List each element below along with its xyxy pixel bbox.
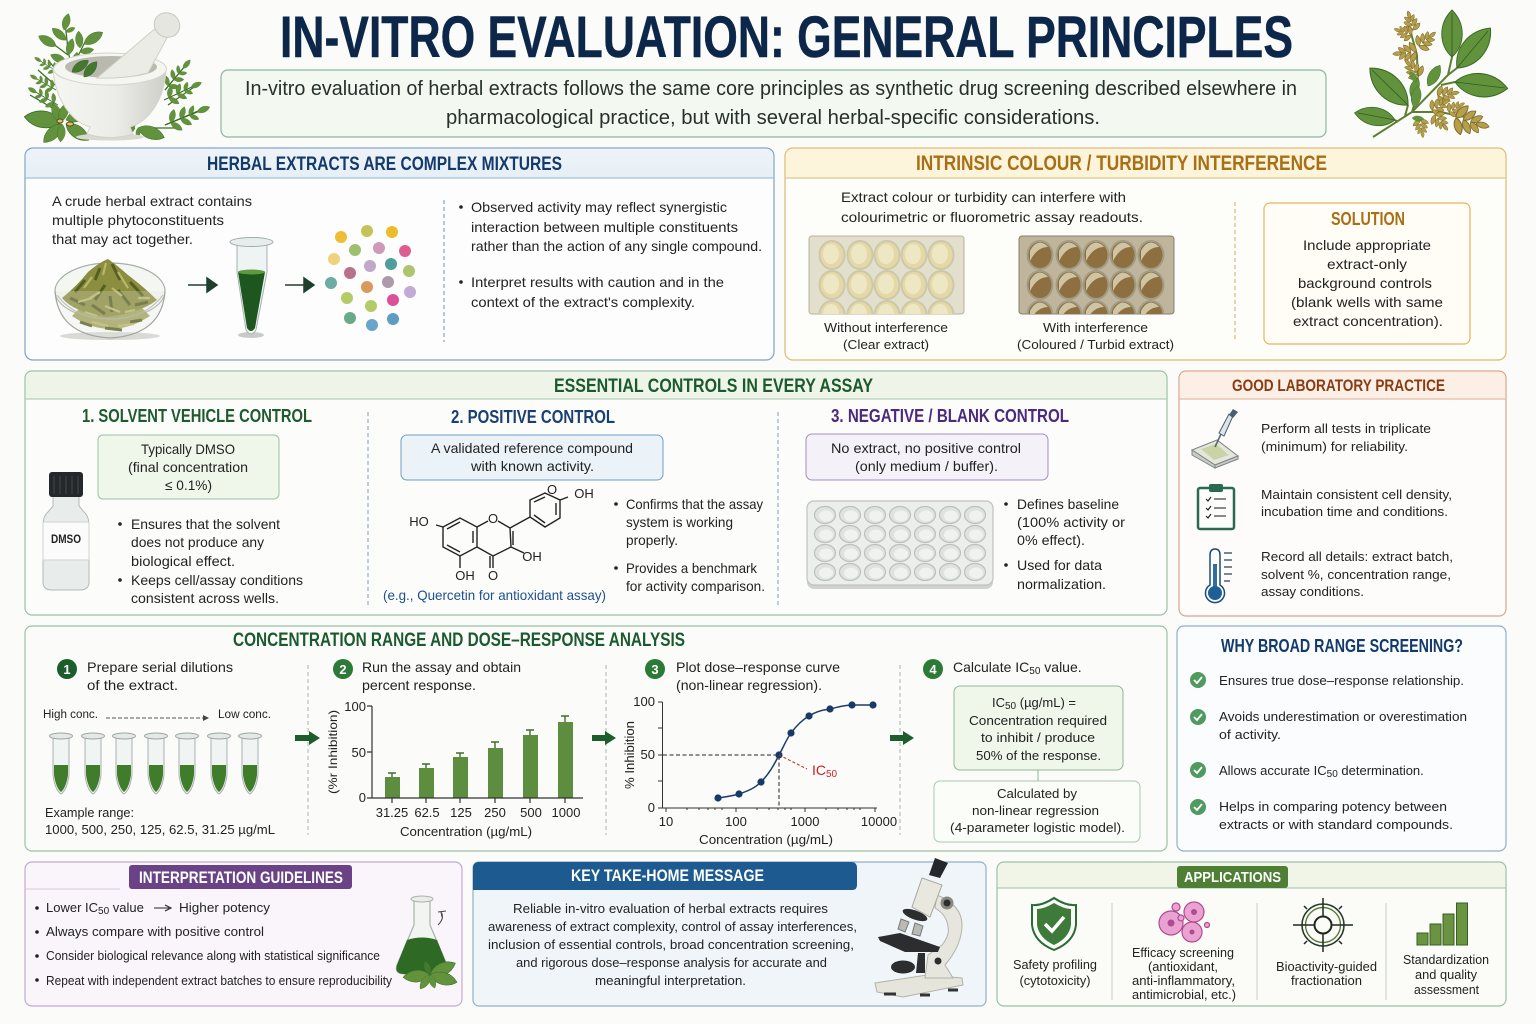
GLP text 2: incubation time and conditions. [1261,504,1448,519]
bullets: normalization. [1017,576,1106,592]
dose-response curve: 10000 [861,814,897,829]
GLP text 3: Record all details: extract batch, [1261,549,1453,564]
step 3 [622,659,897,847]
guideline bullets [35,900,392,988]
dose-response curve: 100 [725,814,747,829]
dose-response curve [622,694,897,847]
bullets: 0% effect). [1017,532,1085,548]
tubes [50,733,262,794]
bar chart: (%r Inhibition) [326,710,340,794]
callout: A validated reference compound [431,440,633,456]
plate: with interference [1018,236,1174,314]
badge heading: INTERPRETATION GUIDELINES [139,868,343,887]
icon: flask with herbs [396,896,459,991]
step 3: Plot dose–response curve [676,659,840,675]
plate captions: Without interference [824,320,948,335]
step 2: Run the assay and obtain [362,659,521,675]
IC50 definition: 50 [1005,701,1017,712]
efficacy screening: anti-inflammatory, [1132,974,1235,988]
check list: Helps in comparing potency between [1219,799,1447,814]
bullets: Ensures that the solvent [131,516,280,532]
check list [1190,672,1467,832]
guideline bullets: value [109,900,144,915]
efficacy screening [1132,902,1236,1002]
panel: essential controls [25,371,1167,615]
solvent vehicle control [43,406,312,606]
dose-response curve: 10 [659,814,673,829]
message text: and rigorous dose–response analysis for accurate and [516,955,827,970]
guideline bullets: 50 [98,906,110,917]
solution box [1264,203,1470,344]
icon: clipboard [1198,484,1234,529]
bullet text: Interpret results with caution and in the [471,274,724,290]
bullets: properly. [626,532,678,548]
step 1: of the extract. [87,677,178,693]
step 4: Calculate IC [953,659,1029,675]
panel: good laboratory practice [1179,371,1506,616]
GLP text 3: solvent %, concentration range, [1261,567,1451,582]
bullet text [459,199,762,310]
panel: colour and turbidity interference [785,148,1506,360]
dose-response curve: % Inhibition [622,721,637,789]
panel: applications [997,862,1506,1006]
subtitle box: pharmacological practice, but with several herbal-specific considerations. [446,107,1100,129]
heading: CONCENTRATION RANGE AND DOSE–RESPONSE ANALYSIS [233,630,685,651]
intro text: multiple phytoconstituents [52,212,224,228]
standardization: and quality [1415,968,1478,982]
heading: INTRINSIC COLOUR / TURBIDITY INTERFERENCE [916,152,1327,175]
efficacy screening: Efficacy screening [1132,946,1234,960]
step 4 [923,659,1140,842]
check list: Allows accurate IC [1219,763,1327,778]
phytoconstituent dots [325,225,416,331]
bar chart: 500 [520,805,542,820]
regression note: non-linear regression [972,803,1099,818]
chemical structure: quercetin: OH [455,568,475,583]
plate captions [824,320,1174,352]
icon: thermometer [1206,549,1232,603]
step 1: Low conc. [218,709,271,721]
step 1: High conc. [43,709,98,721]
bioactivity-guided fractionation [1276,898,1377,988]
bullet text: Observed activity may reflect synergistic [471,199,727,215]
step 1: 1000, 500, 250, 125, 62.5, 31.25 µg/mL [45,822,275,837]
intro text: A crude herbal extract contains [52,193,252,209]
step 1: Example range: [45,805,134,820]
plate captions: (Clear extract) [843,337,929,352]
description [841,189,1143,225]
icon: pipette and plate [1192,409,1238,468]
standardization: Standardization [1403,953,1489,967]
guideline bullets: Higher potency [179,900,271,915]
message text: Reliable in-vitro evaluation of herbal extracts requires [513,901,828,916]
subtitle box [221,70,1326,137]
dose-response curve: IC [812,762,826,778]
bar chart: Concentration (µg/mL) [400,824,532,839]
chemical structure: quercetin: OH [522,549,542,564]
step 1: Prepare serial dilutions [87,659,233,675]
step 4: 50 [1029,666,1041,677]
icon: bowl of herb powder [55,259,165,340]
plate captions: With interference [1043,320,1148,335]
badge heading: APPLICATIONS [1184,869,1281,886]
bar chart: 0 [359,790,366,805]
bullets: consistent across wells. [131,590,279,606]
positive control [383,407,765,603]
description: colourimetric or fluorometric assay readouts. [841,209,1143,225]
callout: with known activity. [470,458,594,474]
message text: meaningful interpretation. [595,973,746,988]
arrow [188,278,217,292]
heading: GOOD LABORATORY PRACTICE [1232,376,1445,395]
solution box: background controls [1298,275,1432,291]
dose-response curve: 50 [826,769,838,780]
callout: No extract, no positive control [831,440,1021,456]
callout: ≤ 0.1%) [165,477,212,493]
regression note: Calculated by [997,786,1077,801]
plate captions: (Coloured / Turbid extract) [1017,337,1174,352]
solution box: extract-only [1327,256,1407,272]
chemical structure: quercetin: HO [409,514,429,529]
check list: Ensures true dose–response relationship. [1219,673,1464,688]
check list: 50 [1327,769,1338,780]
chemical structure: quercetin: OH [574,486,594,501]
bullets: Used for data [1017,557,1102,573]
bullets: Confirms that the assay [626,496,763,512]
chemical structure: quercetin: O [547,482,557,497]
intro text: that may act together. [52,231,193,247]
negative control [806,406,1125,592]
chemical structure: quercetin [409,482,594,583]
message text: inclusion of essential controls, broad concentration screening, [488,937,854,952]
bullet text: rather than the action of any single compound. [471,238,762,254]
panel: dose-response analysis [25,626,1167,851]
dose-response curve: 100 [633,694,655,709]
chemical structure: quercetin: O [488,568,498,583]
badge heading [129,865,352,889]
bullet text: context of the extract's complexity. [471,294,695,310]
subheading: 2. POSITIVE CONTROL [451,407,615,427]
arrow [295,731,320,745]
guideline bullets: Lower IC [46,900,98,915]
standardization [1403,903,1489,997]
safety profiling [1013,898,1097,988]
regression note: (4-parameter logistic model). [950,820,1125,835]
efficacy screening: antimicrobial, etc.) [1132,988,1236,1002]
step 2: 2 [339,662,347,677]
caption: (e.g., Quercetin for antioxidant assay) [383,587,606,603]
icon: DMSO bottle [43,472,89,590]
arrow [890,731,914,745]
GLP text 3 [1261,549,1453,599]
bioactivity-guided fractionation: Bioactivity-guided [1276,960,1377,974]
IC50 definition: 50% of the response. [976,748,1101,763]
subtitle box: In-vitro evaluation of herbal extracts follows the same core principles as synthetic drug screening described elsewhere in [245,78,1297,100]
callout: (final concentration [128,459,248,475]
bullets [1004,496,1125,592]
standardization: assessment [1414,983,1480,997]
bullets: (100% activity or [1017,514,1125,530]
efficacy screening: (antioxidant, [1148,960,1218,974]
solution box: extract concentration). [1293,313,1443,329]
icon: DMSO bottle: DMSO [51,532,81,546]
step 3: 3 [651,662,659,677]
bioactivity-guided fractionation: fractionation [1291,974,1362,988]
bar chart [326,699,583,839]
step 1 [43,659,275,837]
GLP text 1: Perform all tests in triplicate [1261,421,1431,436]
arrow [285,278,314,292]
guideline bullets: Repeat with independent extract batches to ensure reproducibility [46,973,392,988]
callout: (only medium / buffer). [855,458,998,474]
bar chart: 62.5 [414,805,440,820]
icon: tube of extract [230,238,273,338]
bar chart: 250 [484,805,506,820]
bar chart: 50 [352,745,366,760]
chemical structure: quercetin: O [488,511,498,526]
callout: Typically DMSO [141,441,235,457]
panel: complex mixtures [25,148,774,360]
bullet text: interaction between multiple constituents [471,219,738,235]
GLP text 2: Maintain consistent cell density, [1261,487,1452,502]
icon: mortar and pestle with herbs [23,8,215,146]
subheading: 1. SOLVENT VEHICLE CONTROL [82,406,312,426]
GLP text 3: assay conditions. [1261,584,1364,599]
panel: interpretation guidelines [25,862,462,1006]
IC50 definition: to inhibit / produce [981,730,1095,745]
bar chart: 100 [344,699,366,714]
step 3: (non-linear regression). [676,677,822,693]
message text: awareness of extract complexity, control of assay interferences, [488,919,857,934]
badge heading [1177,866,1288,888]
heading: ESSENTIAL CONTROLS IN EVERY ASSAY [554,376,873,397]
panel: key take-home message [473,858,986,1006]
check list: determination. [1338,763,1424,778]
step 2 [326,659,583,839]
GLP text 1 [1261,421,1431,454]
safety profiling: (cytotoxicity) [1020,974,1090,988]
regression note [934,781,1140,842]
panel: why broad range screening [1177,626,1506,851]
icon: herb sprig [1353,8,1509,143]
IC50 definition: IC [992,695,1005,710]
bar chart: 1000 [552,805,580,820]
check list: extracts or with standard compounds. [1219,817,1453,832]
GLP text 2 [1261,487,1452,519]
IC50 definition: (µg/mL) = [1016,695,1076,710]
check list: of activity. [1219,727,1281,742]
badge heading [473,862,857,890]
IC50 definition: Concentration required [969,713,1107,728]
dose-response curve: 0 [648,800,655,815]
callout [98,435,279,499]
dose-response curve: 50 [641,747,655,762]
guideline bullets: Always compare with positive control [46,924,264,939]
dose-response curve: 1000 [791,814,819,829]
solution box: SOLUTION [1331,209,1405,229]
subheading: 3. NEGATIVE / BLANK CONTROL [831,406,1069,426]
callout [806,434,1048,480]
dose-response curve: Concentration (µg/mL) [699,832,833,847]
heading: HERBAL EXTRACTS ARE COMPLEX MIXTURES [207,154,562,175]
callout [401,435,663,480]
plate: without interference [808,236,964,314]
bullets: biological effect. [131,553,235,569]
bullets: system is working [626,514,733,530]
badge heading: KEY TAKE-HOME MESSAGE [571,866,764,885]
bullets [614,496,765,594]
description: Extract colour or turbidity can interfere with [841,189,1126,205]
bullets [118,516,303,606]
intro text [52,193,252,247]
bullets: Defines baseline [1017,496,1119,512]
safety profiling: Safety profiling [1013,958,1097,972]
bar chart: 31.25 [376,805,408,820]
solution box: Include appropriate [1303,237,1431,253]
guideline bullets: Consider biological relevance along with statistical significance [46,948,380,963]
IC50 definition [954,686,1123,770]
icon: blank well plate [807,501,993,589]
arrow [592,731,616,745]
heading: WHY BROAD RANGE SCREENING? [1221,636,1463,656]
bullets: Provides a benchmark [626,560,758,576]
bullets: Keeps cell/assay conditions [131,572,303,588]
icon: microscope [875,858,963,997]
bullets: for activity comparison. [626,578,765,594]
message text [488,901,857,988]
bar chart: 125 [450,805,472,820]
step 4: value. [1040,659,1082,675]
check list: Avoids underestimation or overestimation [1219,709,1467,724]
solution box: (blank wells with same [1291,294,1443,310]
GLP text 1: (minimum) for reliability. [1261,439,1408,454]
step 2: percent response. [362,677,476,693]
bullets: does not produce any [131,534,264,550]
step 4: 4 [929,662,937,677]
step 1: 1 [63,662,71,677]
